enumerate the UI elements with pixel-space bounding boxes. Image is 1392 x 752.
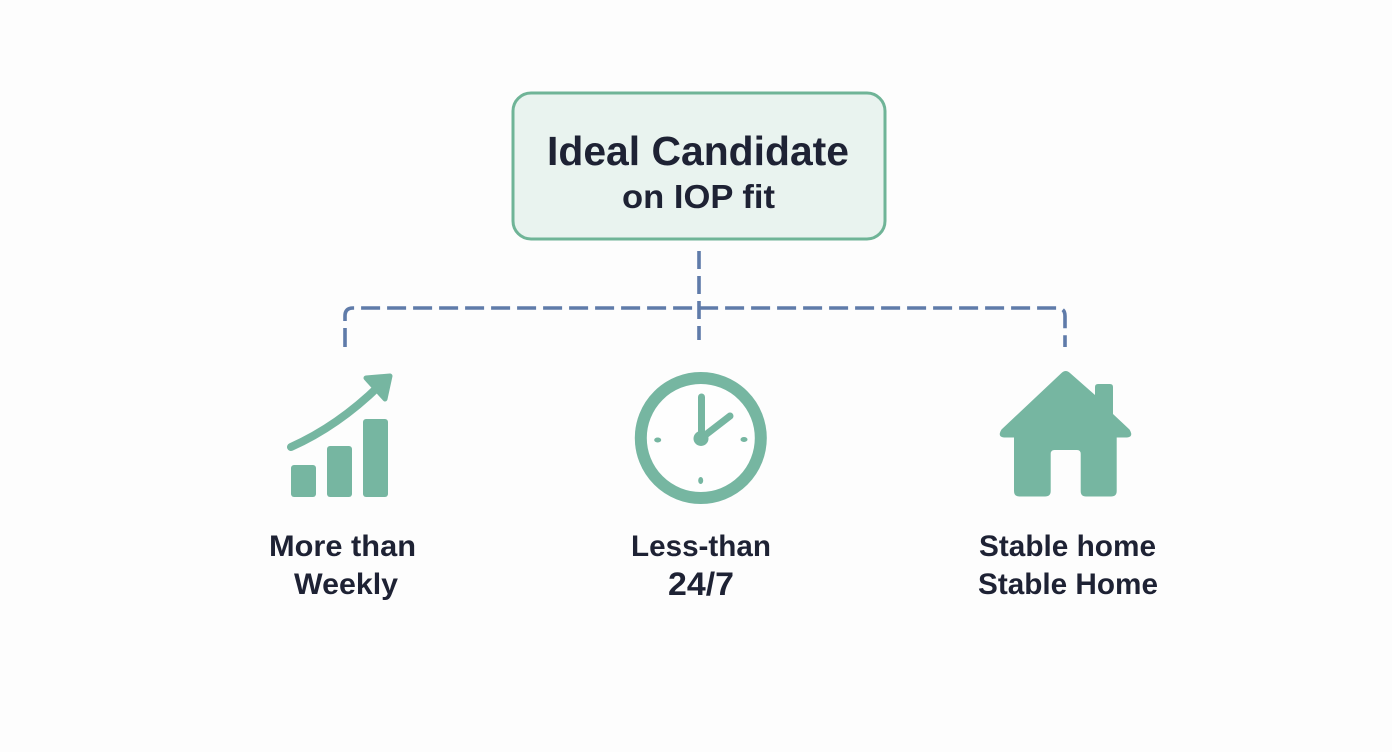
connector: dashed tree linking box to three criteria xyxy=(345,251,1065,347)
subheading: on IOP fit: on IOP fit xyxy=(622,178,775,215)
icon: clock xyxy=(641,378,761,498)
label: Stable home Stable Home: Stable Home xyxy=(978,568,1158,601)
label: Less-than 24/7: Less-than xyxy=(631,530,771,563)
panel: ideal candidate heading box xyxy=(513,93,885,239)
column: stable home xyxy=(978,371,1158,601)
label: More than Weekly xyxy=(269,530,416,601)
column: more than weekly xyxy=(269,376,416,601)
label: Stable home Stable Home: Stable home xyxy=(979,530,1156,563)
label: Stable home Stable Home xyxy=(978,530,1158,601)
heading: Ideal Candidate: Ideal Candidate xyxy=(547,128,849,174)
icon: house xyxy=(1000,371,1131,496)
column: less than 24/7 xyxy=(631,378,771,602)
label: More than Weekly: More than xyxy=(269,530,416,563)
label: More than Weekly: Weekly xyxy=(294,568,398,601)
label: Less-than 24/7: 24/7 xyxy=(668,566,734,602)
icon: rising bar chart with arrow xyxy=(291,376,390,497)
label: Less-than 24/7 xyxy=(631,530,771,602)
